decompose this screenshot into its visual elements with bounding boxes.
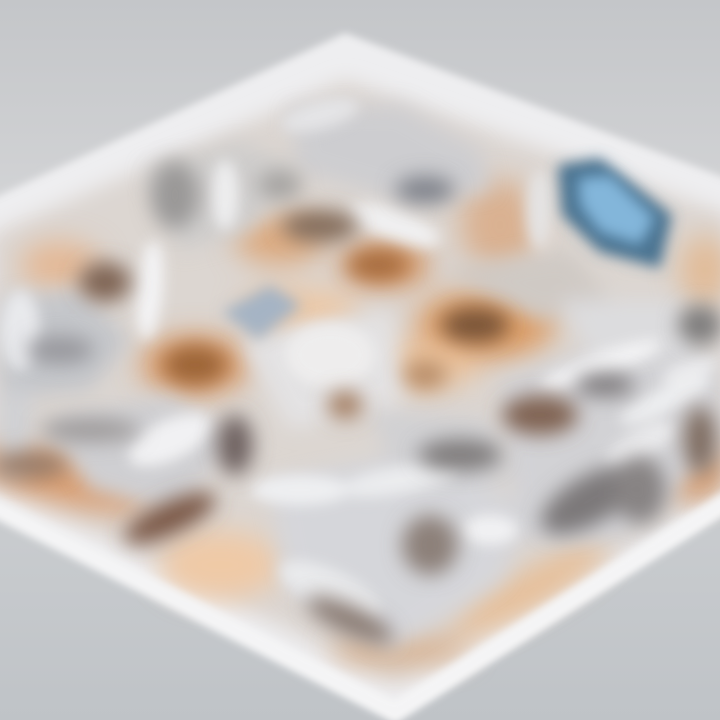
blocks: mid grey masses <box>0 105 720 650</box>
floor: warm orange patches <box>0 180 720 666</box>
blocks: bright highlights <box>0 91 720 631</box>
tray bottom edge highlight <box>0 500 720 712</box>
panel: small blue-grey tile <box>222 285 302 340</box>
blocks: dark brown shadows <box>0 161 720 653</box>
panel: blue screen <box>558 158 672 268</box>
